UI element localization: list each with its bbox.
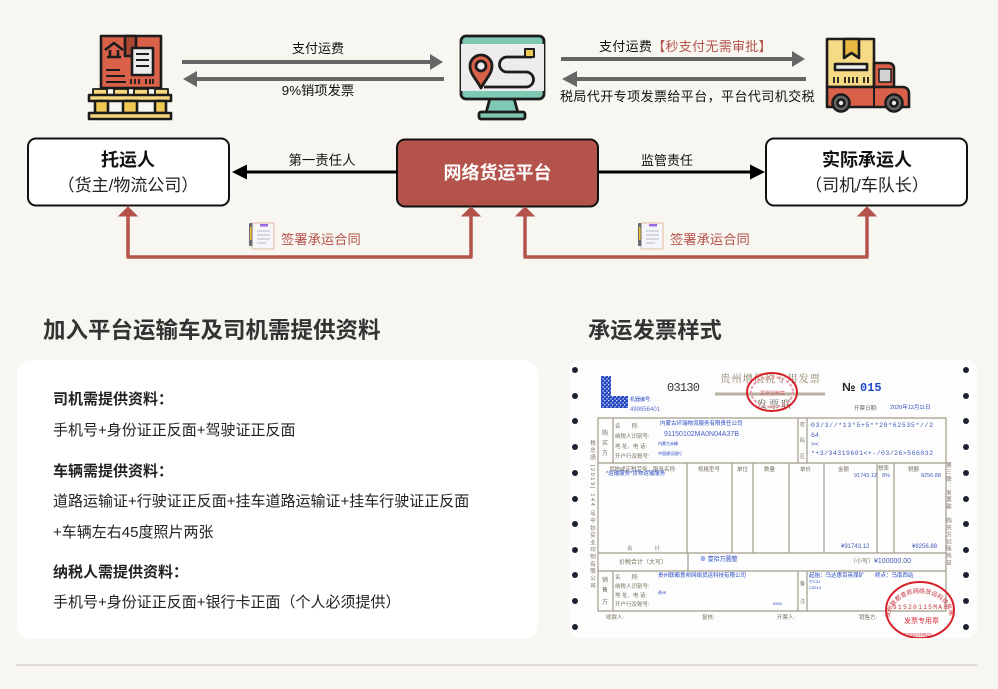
arrow: first responsible party	[232, 164, 397, 180]
red stamp bottom: 52062348923	[904, 632, 932, 637]
red stamp bottom: 贵州联都意邦网络货运科技有限公司	[885, 588, 954, 618]
seller block	[602, 571, 914, 621]
arrow: supervision responsibility	[598, 164, 765, 180]
buyer block: 区	[800, 454, 805, 460]
buyer block	[602, 419, 805, 460]
line items header: 税率	[878, 464, 890, 472]
arrow: pay freight, shipper to platform	[182, 54, 443, 70]
arrow: tax invoice, carrier to platform	[562, 71, 806, 87]
icon: delivery truck	[827, 39, 909, 112]
invoice numbers: 015	[860, 381, 882, 395]
label: supervision responsibility: 监管责任	[641, 153, 693, 168]
heading: required documents: 加入平台运输车及司机需提供资料	[43, 317, 381, 343]
label: tax bureau invoice note: 税局代开专项发票给平台，平台代司机交税	[560, 89, 815, 104]
red stamp top	[747, 373, 797, 411]
taxpayer documents	[53, 563, 401, 611]
buyer block: 购	[602, 429, 608, 437]
QR code	[601, 376, 628, 408]
seller block: 开户行及账号:	[615, 600, 650, 608]
icon: contract document right	[638, 223, 663, 249]
line items header: （小写）¥100000.00	[850, 557, 911, 565]
seller block: 售	[602, 586, 608, 594]
box: shipper	[28, 138, 229, 206]
buyer block: 91150102MA0N04A37B	[664, 431, 739, 438]
line items header: 单位	[737, 465, 749, 473]
label: pay freight: 支付运费	[292, 41, 344, 56]
cipher block: *+3/34319601<+-/03/26>566032	[811, 450, 933, 457]
vehicle documents: 道路运输证+行驶证正反面+挂车道路运输证+挂车行驶证正反面	[53, 493, 469, 510]
arrow head: carrier	[858, 207, 876, 216]
invoice numbers: №	[842, 380, 855, 394]
side notes: 第三联：发票联 购买方记账凭证	[945, 461, 952, 566]
buyer block: 开户行及账号:	[615, 452, 650, 460]
vehicle documents: +车辆左右45度照片两张	[53, 524, 213, 541]
seller block: 备	[800, 580, 805, 587]
line items header: ⊗ 壹拾万圆整	[700, 555, 738, 563]
cipher block: ><	[811, 441, 819, 448]
driver documents	[53, 390, 296, 439]
line items header	[606, 464, 941, 566]
seller block: 收款人:	[606, 613, 625, 621]
arrow: contract bracket left	[128, 216, 471, 257]
arrow: pay freight, platform to carrier	[561, 51, 805, 67]
line items header: 金额	[838, 465, 850, 473]
arrow: contract bracket right	[525, 216, 867, 257]
line items header: 税额	[908, 465, 920, 473]
seller block: 纳税人识别号:	[615, 582, 650, 590]
seller block: 销	[602, 576, 608, 584]
seller block: 贵州联都意邦网络货运科技有限公司	[658, 571, 746, 579]
box: platform	[397, 140, 598, 206]
line items header: 合 计	[627, 544, 661, 552]
box: shipper: 托运人	[101, 150, 155, 170]
red stamp top: 发票监制章	[760, 390, 785, 397]
seller block: 开票人:	[777, 614, 796, 621]
line items header: ¥91743.12	[841, 544, 870, 550]
invoice numbers: 机器编号:	[630, 396, 651, 403]
line items header: ¥8256.88	[912, 544, 938, 550]
buyer block: 密	[800, 421, 805, 428]
buyer block: 地 址、电 话:	[615, 442, 648, 450]
line items header: 数量	[764, 465, 776, 473]
buyer block: 方	[602, 449, 608, 457]
vehicle documents: 车辆需提供资料：	[53, 462, 173, 480]
buyer block: 中国建设银行	[658, 450, 682, 456]
red stamp bottom: 发票专用章	[904, 616, 939, 625]
seller block: 0900	[773, 601, 783, 606]
seller block: 方	[602, 598, 608, 606]
panel: required documents	[17, 360, 538, 639]
box: carrier: （司机/车队长）	[805, 176, 929, 195]
box: carrier: 实际承运人	[822, 149, 912, 170]
label: pay freight instantly: 支付运费【秒支付无需审批】	[599, 39, 772, 54]
taxpayer documents: 纳税人需提供资料：	[53, 563, 188, 581]
driver documents: 手机号+身份证正反面+驾驶证正反面	[53, 422, 296, 439]
box: platform: 网络货运平台	[444, 162, 552, 183]
arrow head: platform right	[516, 207, 534, 216]
invoice title: 贵州增值税专用发票	[720, 372, 820, 385]
label: sign contract left: 签署承运合同	[281, 231, 361, 247]
buyer block: 内蒙古环瑞物流服务有限责任公司	[660, 419, 743, 427]
line items header: *运输服务*货物运输服务	[606, 469, 666, 477]
buyer block: 纳税人识别号:	[615, 432, 650, 440]
cipher block: 03/3//*13*5+5**20*62535*//2	[811, 422, 933, 429]
box: carrier	[766, 138, 967, 206]
line items header: 91743.12	[854, 473, 877, 479]
label: 9% invoice: 9%销项发票	[282, 83, 354, 98]
line items header: 9%	[882, 473, 890, 479]
line items header: 价税合计（大写）	[619, 558, 667, 566]
red stamp bottom: 91520115MA6	[893, 604, 947, 611]
cipher block: 64	[811, 432, 819, 439]
buyer block: 买	[602, 439, 608, 447]
invoice numbers: 03130	[667, 381, 700, 395]
heading: invoice sample: 承运发票样式	[588, 318, 722, 343]
icon: contract document left	[249, 223, 274, 249]
sprocket holes	[572, 367, 969, 630]
invoice numbers: 2020年12月11日	[890, 403, 931, 411]
invoice numbers	[630, 380, 931, 413]
line items header: 单价	[800, 465, 812, 473]
invoice numbers: 499956401	[630, 407, 661, 413]
side notes: 税总函 [2019] 144 号中钞实业印制有限公司	[589, 439, 596, 588]
label: first responsible party: 第一责任人	[289, 152, 355, 168]
seller block: 地 址、电 话:	[615, 591, 648, 599]
cipher block	[811, 422, 933, 457]
label: sign contract right: 签署承运合同	[670, 231, 750, 247]
invoice table grid	[598, 418, 946, 611]
buyer block: 名 称:	[615, 422, 639, 430]
seller block: 注	[800, 598, 805, 605]
side notes	[589, 439, 952, 588]
seller block: 复核:	[702, 613, 715, 621]
seller block: 宁C3J	[809, 578, 820, 584]
panel: invoice sample: 发票联	[757, 398, 791, 411]
line items header: 规格型号	[698, 465, 721, 473]
seller block: 名 称:	[615, 573, 639, 581]
taxpayer documents: 手机号+身份证正反面+银行卡正面（个人必须提供）	[53, 594, 401, 611]
arrow: invoice, platform to shipper	[183, 71, 444, 87]
buyer block: 内蒙古赤峰	[658, 440, 678, 446]
seller block: 贵州	[658, 589, 666, 595]
line items header: 8256.88	[921, 473, 941, 479]
buyer block: 码	[800, 437, 805, 444]
arrow head: platform left	[462, 207, 480, 216]
invoice numbers: 开票日期:	[854, 405, 878, 412]
icon: monitor with route	[461, 36, 544, 119]
vehicle documents	[53, 462, 469, 541]
driver documents: 司机需提供资料：	[53, 390, 173, 408]
seller block: 起始：乌达惠百英煤矿 终点：乌南西站	[809, 571, 914, 579]
box: shipper: （货主/物流公司）	[58, 176, 198, 195]
seller block: 销售方:	[859, 613, 878, 621]
arrow head: shipper	[119, 207, 137, 216]
line items header: 货物或应税劳务、服务名称	[609, 465, 676, 473]
icon: cargo box on pallet	[89, 36, 171, 119]
seller block: C2013	[809, 585, 822, 590]
